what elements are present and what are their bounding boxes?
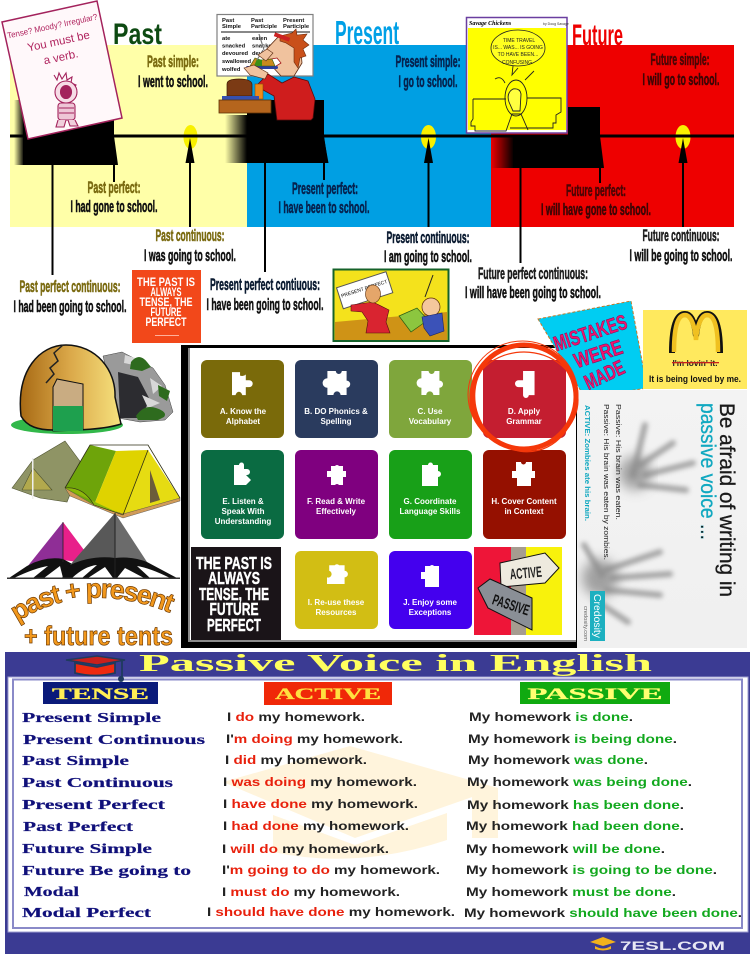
- credosity badge: credosity.com: [582, 606, 588, 641]
- card: You must be a verb: a verb.: [43, 48, 79, 67]
- tile E: [201, 450, 284, 539]
- present labels: Present perfect contiuous:: [210, 276, 320, 294]
- examples: Passive: His brain was eaten by zombies.: [602, 404, 611, 560]
- TENSE column: Present Perfect: [22, 798, 166, 813]
- poster: the past is always tense (black): THE PAST IS: [196, 553, 272, 573]
- shadow hands: [584, 425, 693, 622]
- card: verb participle table: wolfed: [221, 67, 241, 73]
- card: verb participle table: Past: [222, 18, 234, 24]
- tile I: I. Re-use these: [308, 598, 365, 607]
- TENSE column: Modal Perfect: [22, 906, 152, 921]
- ACTIVE column: I was doing my homework.: [223, 775, 417, 789]
- past labels: Past perfect:: [88, 179, 140, 197]
- comic: Savage Chickens time travel: Savage Chickens: [469, 21, 512, 27]
- card: verb participle table: snacked: [252, 44, 276, 50]
- tile A: [201, 360, 284, 438]
- title: Passive Voice in English: [139, 651, 652, 677]
- comic: Savage Chickens time travel: TIME TRAVEL: [503, 38, 535, 44]
- tile C: Vocabulary: [409, 417, 452, 426]
- card: You must be a verb: You must be: [26, 30, 91, 54]
- comic: Savage Chickens time travel: TO HAVE BEEN...: [498, 52, 538, 58]
- hand palms: [582, 456, 651, 597]
- present labels: Present simple:: [396, 53, 460, 71]
- tile I: Resources: [316, 608, 357, 617]
- timeline chart: [10, 14, 734, 316]
- watermark hat: [223, 746, 498, 859]
- poster: McDonald's it is being loved by me: [643, 310, 747, 389]
- table frame: [8, 677, 748, 932]
- tile E: E. Listen &: [222, 497, 264, 506]
- card: verb participle table: devoured: [252, 51, 279, 57]
- tile H: H. Cover Content: [491, 497, 557, 506]
- ACTIVE column: I did my homework.: [225, 753, 367, 767]
- illustration: cave hut: [11, 345, 173, 434]
- heading: Present: Present: [335, 14, 399, 51]
- ACTIVE column: I'm going to do my homework.: [222, 863, 440, 877]
- poster: the past is always tense (orange): FUTURE: [150, 307, 182, 319]
- card: You must be a verb: [2, 1, 122, 139]
- tile C: C. Use: [418, 407, 443, 416]
- poster: the past is always tense (orange): TENSE, THE: [140, 297, 193, 309]
- poster: the past is always tense (black): ALWAYS: [208, 568, 260, 588]
- sticker: mistakes were made: MADE: [581, 356, 629, 395]
- tile D: [483, 360, 566, 438]
- comic: Savage Chickens time travel: by Doug Savage: [543, 22, 569, 26]
- past labels: [14, 53, 236, 316]
- tile J: Exceptions: [409, 608, 452, 617]
- poster: the past is always tense (orange): [132, 270, 201, 343]
- future labels: I will have gone to school.: [541, 201, 651, 219]
- tile G: G. Coordinate: [404, 497, 457, 506]
- PASSIVE column: My homework should have been done .: [464, 906, 742, 920]
- heading: Future: Future: [572, 19, 623, 52]
- card: verb participle table: eaten: [252, 36, 268, 42]
- PASSIVE column: My homework was done .: [468, 753, 648, 767]
- illustration: present perfect gift: PRESENT PERFECT: [340, 279, 388, 300]
- TENSE column: Past Simple: [22, 754, 129, 769]
- TENSE column: [22, 682, 206, 921]
- card: verb participle table: Past: [251, 18, 263, 24]
- present labels: Present continuous:: [386, 229, 470, 247]
- ACTIVE column: I must do my homework.: [222, 885, 400, 899]
- illustration: boy eating at desk: [219, 29, 315, 120]
- ACTIVE column: I have done my homework.: [223, 797, 418, 811]
- past labels: Past perfect continuous:: [20, 278, 120, 296]
- ACTIVE column: I'm doing my homework.: [226, 732, 403, 746]
- tile B: B. DO Phonics &: [304, 407, 368, 416]
- poster: the past is always tense (black): FUTURE: [210, 599, 258, 619]
- caption: past + present + future tents: past + present: [10, 582, 176, 626]
- past labels: I had gone to school.: [70, 198, 158, 216]
- tile G: Language Skills: [400, 507, 461, 516]
- PASSIVE column: My homework will be done .: [466, 842, 665, 856]
- past labels: I was going to school.: [144, 247, 236, 265]
- illustration: star tents: [7, 513, 180, 579]
- scribbled red circle around D: [459, 332, 587, 463]
- panel: present band: [247, 45, 491, 227]
- heading: be afraid of writing in passive voice: [696, 403, 738, 597]
- poster: the past is always tense (orange): PERFECT: [146, 317, 186, 329]
- card: verb participle table: eating: [284, 36, 302, 42]
- poster: the past is always tense (orange): ALWAYS: [150, 287, 182, 299]
- future perfect black block: [491, 107, 604, 168]
- tile D: D. Apply: [508, 407, 541, 416]
- PASSIVE column: My homework is going to be done .: [466, 863, 717, 877]
- PASSIVE column: My homework must be done .: [466, 885, 676, 899]
- examples: [583, 404, 623, 560]
- ACTIVE column: [207, 682, 455, 919]
- poster: McDonald's it is being loved by me: I'm lovin' it.: [672, 358, 718, 368]
- tile B: Spelling: [320, 417, 352, 426]
- future labels: Future perfect:: [566, 182, 626, 200]
- card: verb participle table: ate: [222, 36, 231, 42]
- card: verb participle table: Simple: [222, 24, 242, 30]
- future labels: [465, 51, 732, 302]
- ACTIVE column: ACTIVE: [275, 686, 381, 703]
- panel: passive voice in English table: [5, 651, 750, 954]
- past labels: Past continuous:: [156, 227, 224, 245]
- tile G: [389, 450, 472, 539]
- present labels: I have been going to school.: [206, 296, 324, 314]
- TENSE column: Future Simple: [22, 842, 152, 857]
- poster: the past is always tense (orange): THE PAST IS: [137, 277, 195, 289]
- illustration: present perfect gift: [334, 270, 448, 341]
- heading: be afraid of writing in passive voice: passive voice ...: [696, 403, 719, 540]
- TENSE column: Modal: [24, 885, 79, 900]
- tile D: Grammar: [506, 417, 542, 426]
- card: verb participle table: Participle: [251, 24, 278, 30]
- TENSE column: Past Perfect: [23, 820, 133, 835]
- TENSE column: TENSE: [52, 686, 149, 703]
- timeline axis: [10, 134, 734, 138]
- TENSE column: Past Continuous: [22, 776, 174, 791]
- present labels: I have been to school.: [278, 199, 370, 217]
- poster: the past is always tense (black): [191, 547, 281, 640]
- tile F: Effectively: [316, 507, 357, 516]
- card: verb participle table: [217, 14, 313, 76]
- credosity badge: Credosity: [591, 594, 603, 639]
- poster: the past is always tense (black): TENSE, THE: [199, 584, 269, 604]
- poster: the past is always tense (black): PERFECT: [207, 615, 261, 635]
- ACTIVE column: I should have done my homework.: [207, 905, 455, 919]
- present labels: Present perfect:: [292, 180, 358, 198]
- sign: active and passive: [474, 547, 562, 635]
- tile E: Understanding: [215, 517, 271, 526]
- tile H: [483, 450, 566, 539]
- tile J: J. Enjoy some: [403, 598, 457, 607]
- tile B: [295, 360, 378, 438]
- sticker: mistakes were made: [538, 301, 647, 398]
- icon: graduation cap: [66, 656, 125, 682]
- logo: 7ESL.COM: 7ESL.COM: [620, 939, 725, 953]
- card: verb participle table: swallowed: [222, 59, 251, 65]
- caption: past + present + future tents: [10, 582, 176, 651]
- ACTIVE column: I do my homework.: [227, 710, 365, 724]
- tile F: [295, 450, 378, 539]
- present labels: I am going to school.: [384, 248, 472, 266]
- passive voice poster: [577, 390, 747, 648]
- present perfect black block: [225, 100, 328, 163]
- card: verb participle table: snacked: [222, 44, 246, 50]
- tile H: in Context: [504, 507, 544, 516]
- yellow time markers: [184, 125, 690, 149]
- PASSIVE column: My homework is being done .: [468, 732, 677, 746]
- past labels: I went to school.: [138, 73, 208, 91]
- past perfect black block: [14, 100, 118, 165]
- card: verb participle table: devoured: [222, 51, 249, 57]
- TENSE column: Present Continuous: [23, 733, 206, 748]
- TENSE column: Present Simple: [22, 711, 161, 726]
- PASSIVE column: [464, 682, 742, 920]
- present labels: [206, 53, 472, 314]
- sticker: mistakes were made: WERE: [571, 336, 626, 373]
- tile I: [295, 551, 378, 629]
- heading: Past: Past: [113, 18, 162, 51]
- panel: past band: [10, 45, 247, 227]
- card: verb participle table: Present: [283, 18, 304, 24]
- PASSIVE column: PASSIVE: [528, 686, 662, 703]
- ACTIVE column: I had done my homework.: [223, 819, 409, 833]
- ACTIVE column: I will do my homework.: [222, 842, 389, 856]
- tile A: Alphabet: [226, 417, 260, 426]
- TENSE column: Future Be going to: [22, 864, 191, 879]
- future labels: I will have been going to school.: [465, 284, 601, 302]
- logo: 7ESL.COM: [590, 937, 725, 953]
- card: You must be a verb: Tense? Moody? Irregular?: [6, 11, 98, 40]
- arrows to tense labels: [52, 138, 688, 275]
- sign: active and passive: ACTIVE: [509, 564, 543, 583]
- caption: past + present + future tents: + future tents: [24, 621, 173, 651]
- sign: active and passive: PASSIVE: [490, 592, 532, 619]
- examples: ACTIVE: Zombies ate his brain.: [583, 405, 592, 521]
- tile F: F. Read & Write: [307, 497, 366, 506]
- tile A: A. Know the: [220, 407, 267, 416]
- PASSIVE column: My homework has been done .: [467, 798, 684, 812]
- card: verb participle table: Participle: [283, 24, 310, 30]
- comic: Savage Chickens time travel: [466, 18, 569, 133]
- tile J: [389, 551, 472, 629]
- illustration: olive and yellow tents: [12, 441, 180, 518]
- present labels: I go to school.: [398, 73, 458, 91]
- comic: Savage Chickens time travel: IS... WAS... IS GOING: [493, 45, 543, 51]
- tile C: [389, 360, 472, 438]
- PASSIVE column: My homework had been done .: [466, 819, 684, 833]
- tile E: Speak With: [221, 507, 265, 516]
- sticker: mistakes were made: MISTAKES: [551, 311, 630, 356]
- past labels: Past simple:: [147, 53, 199, 71]
- credosity badge: [582, 591, 605, 641]
- panel: future band: [491, 45, 734, 227]
- past labels: I had been going to school.: [14, 298, 126, 316]
- heading: be afraid of writing in passive voice: Be afraid of writing in: [715, 403, 738, 597]
- panel: literacy skills grid: [181, 345, 577, 648]
- comic: Savage Chickens time travel: CONFUSING: [502, 60, 532, 66]
- PASSIVE column: My homework was being done .: [467, 775, 692, 789]
- examples: Passive: His brain was eaten.: [614, 404, 623, 520]
- future labels: Future perfect continuous:: [478, 265, 588, 283]
- PASSIVE column: My homework is done .: [469, 710, 633, 724]
